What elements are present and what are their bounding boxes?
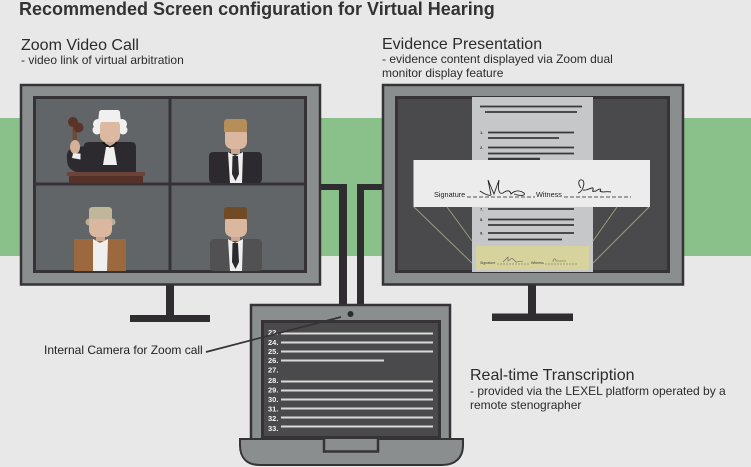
laptop screen: transcript: 30.	[268, 395, 278, 404]
laptop screen: transcript: 25.	[268, 347, 278, 356]
evidence document: 2.	[480, 145, 483, 150]
camera callout: Internal Camera for Zoom call	[44, 343, 203, 357]
laptop screen: transcript: 32.	[268, 414, 278, 423]
signature scribbles	[480, 180, 611, 195]
evidence document: 9.	[480, 230, 483, 236]
heading: evidence presentation: monitor display feature	[382, 66, 504, 80]
monitor: evidence presentation	[383, 85, 683, 321]
laptop screen: transcript: 26.	[268, 356, 278, 365]
laptop screen: transcript: 29.	[268, 386, 278, 394]
camera callout	[44, 317, 341, 357]
highlighted signature strip: Witness	[531, 261, 544, 265]
heading: Zoom video call	[21, 37, 184, 67]
signature zoom card: Witness	[536, 190, 562, 199]
heading: Zoom video call: Zoom Video Call	[21, 37, 139, 54]
laptop screen: transcript: 27.	[268, 366, 278, 374]
heading: evidence presentation: - evidence content displayed via Zoom dual	[382, 52, 613, 66]
webcam	[348, 311, 354, 317]
heading: evidence presentation	[382, 36, 613, 80]
person: bottom left participant	[74, 207, 126, 271]
laptop screen: transcript: 28.	[268, 376, 278, 385]
laptop screen: transcript: 24.	[268, 338, 278, 347]
person: judge with gavel	[67, 110, 145, 183]
person: top right participant	[209, 119, 262, 183]
text: real-time transcription: Real-time Transcription	[470, 367, 634, 384]
heading: evidence presentation: Evidence Presentation	[382, 36, 542, 53]
laptop screen: transcript: 31.	[268, 404, 278, 414]
highlighted signature strip	[476, 246, 589, 270]
laptop screen: transcript: 33.	[268, 424, 278, 433]
laptop screen: transcript: 22.	[268, 328, 278, 337]
signature zoom card	[414, 160, 650, 207]
text: real-time transcription	[470, 367, 726, 412]
monitor: Zoom video call	[21, 85, 320, 322]
signature zoom card: Signature	[434, 190, 465, 199]
evidence document: 8.	[480, 217, 483, 222]
zoom projection lines	[414, 207, 649, 263]
green background band	[0, 118, 751, 256]
person: bottom right participant	[210, 207, 262, 271]
heading: Zoom video call: - video link of virtual arbitration	[21, 53, 184, 67]
text: real-time transcription: remote stenographer	[470, 398, 581, 412]
evidence document	[472, 97, 593, 272]
laptop screen: transcript	[262, 322, 440, 438]
evidence document: 1.	[480, 130, 483, 135]
text: real-time transcription: - provided via the LEXEL platform operated by a	[470, 384, 726, 398]
connecting cables	[321, 184, 382, 305]
trackpad notch	[324, 439, 378, 452]
laptop base	[240, 439, 463, 465]
laptop	[240, 305, 463, 465]
evidence document: 7.	[480, 206, 483, 212]
highlighted signature strip: Signature	[480, 261, 495, 265]
